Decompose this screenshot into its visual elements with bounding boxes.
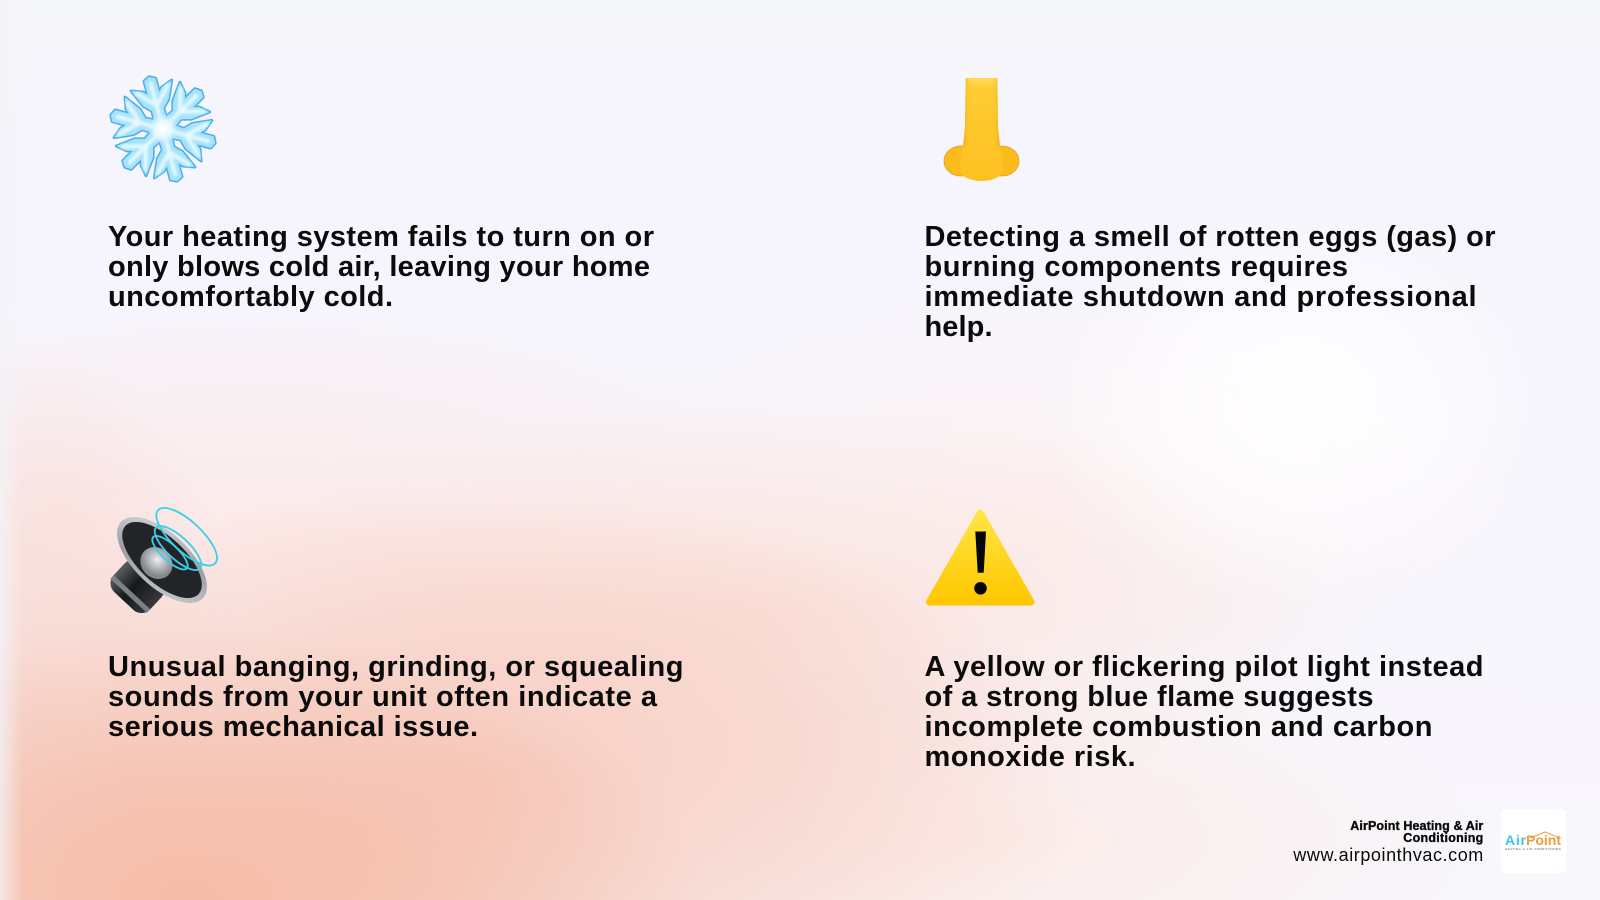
panel: strange smells	[924, 78, 1496, 343]
text: pilot light: incomplete combustion and carbon	[924, 711, 1432, 743]
panel: loud noises	[103, 499, 683, 743]
text: no heat: only blows cold air, leaving your home	[108, 251, 650, 283]
panel: pilot light	[924, 513, 1484, 773]
logo: AirPoint badge: Air	[1505, 832, 1527, 848]
text: loud noises: sounds from your unit often indicate a	[108, 681, 658, 713]
text: strange smells: burning components requires	[924, 251, 1348, 283]
text: loud noises	[108, 651, 684, 743]
text: pilot light: A yellow or flickering pilot light instead	[924, 651, 1484, 683]
footer: company credit	[1292, 819, 1483, 865]
text: strange smells: help.	[924, 311, 992, 343]
text: no heat: uncomfortably cold.	[108, 281, 393, 313]
logo: AirPoint badge: Point	[1526, 832, 1561, 848]
icon: nose	[944, 78, 1019, 181]
text: strange smells: immediate shutdown and professional	[924, 281, 1476, 313]
logo: AirPoint badge: HEATING & AIR CONDITIONING	[1505, 847, 1562, 851]
panel: no heat	[94, 62, 654, 313]
footer: company credit: AirPoint Heating & Air	[1350, 819, 1483, 833]
footer: company credit: www.airpointhvac.com	[1292, 845, 1483, 865]
text: pilot light	[924, 651, 1484, 773]
text: strange smells: Detecting a smell of rotten eggs (gas) or	[924, 221, 1496, 253]
logo: AirPoint badge	[1501, 809, 1566, 873]
text: no heat: Your heating system fails to turn on or	[108, 221, 654, 253]
text: strange smells	[924, 221, 1496, 343]
icon: snowflake	[94, 62, 232, 196]
text: loud noises: Unusual banging, grinding, or squealing	[108, 651, 684, 683]
text: no heat	[108, 221, 654, 313]
text: pilot light: of a strong blue flame suggests	[924, 681, 1374, 713]
text: pilot light: monoxide risk.	[924, 741, 1136, 773]
icon: speaker	[103, 499, 225, 618]
footer: company credit: Conditioning	[1403, 831, 1483, 845]
icon: warning triangle	[930, 513, 1031, 602]
text: loud noises: serious mechanical issue.	[108, 711, 478, 743]
